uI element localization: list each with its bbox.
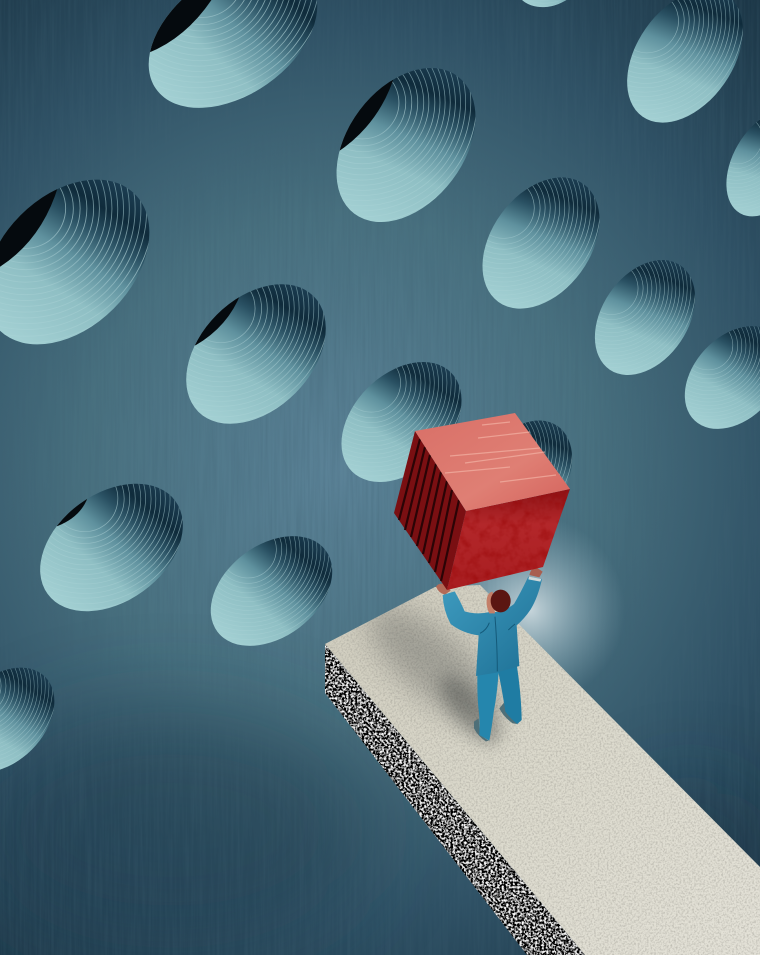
hole: behind cube right — [366, 326, 611, 571]
platform top surface — [320, 580, 760, 955]
hair — [491, 590, 511, 612]
hole: lower centre — [115, 417, 381, 682]
cube right face — [447, 489, 570, 590]
glow behind figure — [430, 510, 630, 710]
red cube — [394, 413, 575, 595]
hole: centre left — [186, 284, 326, 424]
hole: top centre-left — [148, 0, 318, 108]
platform side face: granite — [320, 640, 590, 955]
hole: middle right large — [362, 66, 646, 350]
jacket with raised arms — [443, 577, 542, 676]
jacket shading — [480, 617, 515, 671]
left leg — [477, 663, 499, 741]
hole: behind cube left — [232, 243, 510, 522]
shirt cuff — [528, 577, 541, 582]
hole: right middle — [489, 165, 734, 411]
hole: right edge upper — [635, 33, 760, 247]
hole: bottom left edge — [0, 564, 97, 807]
cube top face — [415, 413, 570, 511]
figure: man in blue suit seen from behind — [436, 568, 543, 741]
neck and face — [487, 592, 495, 613]
hole: top right — [508, 0, 760, 164]
cube left face with dark stripes — [394, 431, 466, 590]
right hand — [529, 568, 543, 577]
shoes — [474, 703, 517, 741]
right leg — [497, 660, 522, 724]
hole: sliver at top edge — [461, 0, 614, 27]
hole: lower left — [40, 484, 183, 612]
hole: upper left large — [0, 180, 150, 344]
left hand — [436, 584, 451, 595]
hole: top centre — [336, 68, 476, 222]
hole: right edge lower — [590, 227, 760, 463]
platform: stone ledge — [320, 580, 760, 955]
